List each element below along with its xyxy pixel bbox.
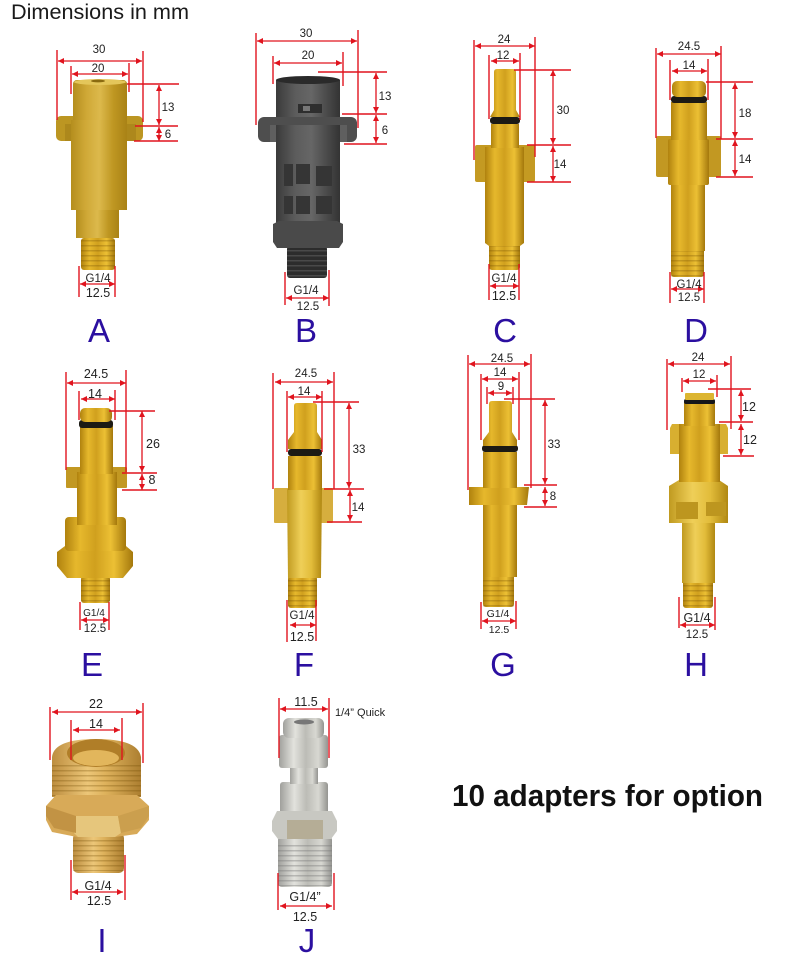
icon: brass adapter F — [274, 403, 333, 608]
dimension labels B: 30 — [300, 28, 312, 40]
adapter J — [272, 695, 386, 959]
dimension labels H: 12.5 — [686, 629, 708, 641]
dimension labels G: 33 — [548, 439, 560, 451]
dimension lines G — [468, 354, 557, 629]
dimension lines E — [66, 370, 157, 630]
dimension labels G: G1/4 — [487, 608, 510, 620]
icon: brass adapter C — [475, 69, 535, 270]
dimension labels J: 12.5 — [293, 910, 317, 924]
adapter I — [46, 697, 149, 959]
dimension labels A — [86, 44, 174, 300]
dimension labels H — [683, 352, 757, 641]
dimension labels B: 12.5 — [297, 301, 319, 313]
dimension labels C: G1/4 — [492, 273, 517, 285]
letter E: E — [81, 646, 103, 683]
dimension labels I: 14 — [89, 717, 103, 731]
dimension labels C: 24 — [498, 34, 511, 46]
adapter E — [57, 367, 160, 683]
dimension labels B — [294, 28, 391, 313]
letter F: F — [294, 646, 314, 683]
dimension labels F — [290, 368, 365, 644]
dimension labels C: 12.5 — [492, 289, 516, 303]
dimension labels D: G1/4 — [677, 279, 702, 291]
dimension labels I — [84, 697, 112, 908]
icon: stainless quick connect J — [272, 718, 337, 887]
dimension labels I: 22 — [89, 697, 103, 711]
dimension lines A — [57, 50, 179, 297]
dimension labels F: 24.5 — [295, 368, 317, 380]
dimension labels B: G1/4 — [294, 285, 319, 297]
letter H: H — [684, 646, 708, 683]
dimension labels B: 20 — [302, 50, 314, 62]
letter A: A — [88, 312, 110, 349]
dimension labels H: 12 — [693, 369, 705, 381]
dimension labels I: G1/4 — [84, 879, 112, 893]
dimension labels B: 6 — [382, 125, 388, 137]
dimension labels C — [492, 34, 569, 303]
dimension lines D — [656, 46, 753, 303]
icon: gold adapter H — [669, 393, 728, 608]
dimension labels A: 20 — [92, 63, 104, 75]
dimension labels D: 24.5 — [678, 41, 700, 53]
letter B: B — [295, 312, 317, 349]
dimension labels E: 8 — [149, 473, 156, 487]
dimension labels F: 33 — [353, 444, 365, 456]
dimension labels A: 12.5 — [86, 286, 110, 300]
dimension labels B: 13 — [379, 91, 391, 103]
dimension labels H: 12 — [743, 433, 757, 447]
callout: adapter count: 10 adapters for option — [452, 778, 763, 813]
dimension labels D — [677, 41, 752, 304]
icon: brass adapter E — [57, 408, 133, 603]
dimension labels F: 14 — [352, 502, 365, 514]
dimension labels C: 14 — [554, 159, 567, 171]
dimension labels H: G1/4 — [683, 611, 711, 625]
icon: brass adapter A — [56, 79, 143, 270]
adapter H — [667, 352, 757, 683]
dimension labels E: 26 — [146, 437, 160, 451]
dimension labels A: 13 — [162, 102, 174, 114]
dimension labels J: 1/4” Quick — [335, 707, 386, 719]
dimension labels G: 9 — [498, 381, 504, 393]
dimension labels E: 12.5 — [84, 623, 106, 635]
dimension labels A: G1/4 — [86, 273, 111, 285]
dimension lines C — [474, 37, 571, 300]
dimension labels J: 11.5 — [294, 695, 318, 709]
dimension labels G — [487, 353, 560, 636]
dimension labels C: 30 — [557, 105, 569, 117]
letter I: I — [97, 922, 107, 959]
dimension labels D: 14 — [739, 154, 752, 166]
letter J: J — [299, 922, 315, 959]
dimension labels A: 6 — [165, 129, 171, 141]
adapter D — [656, 41, 753, 349]
adapter C — [474, 34, 571, 349]
dimension labels D: 12.5 — [678, 292, 700, 304]
dimension labels G: 12.5 — [489, 624, 509, 636]
dimension labels E: 14 — [88, 387, 102, 401]
dimension labels C: 12 — [497, 50, 509, 62]
dimension labels D: 18 — [739, 108, 751, 120]
dimension labels E: 24.5 — [84, 367, 108, 381]
adapter B — [256, 28, 391, 349]
dimension labels J: G1/4” — [289, 890, 321, 904]
adapter A — [56, 44, 179, 349]
icon: brass adapter D — [656, 81, 721, 277]
dimension labels D: 14 — [683, 60, 696, 72]
icon: brass adapter G — [469, 401, 529, 607]
dimension lines F — [273, 372, 364, 642]
dimension labels H: 24 — [692, 352, 705, 364]
adapter G — [468, 353, 560, 683]
dimension labels G: 8 — [550, 491, 556, 503]
dimension labels F: 12.5 — [290, 630, 314, 644]
dimension labels J — [289, 695, 386, 924]
dimension lines J — [278, 698, 334, 910]
dimension labels G: 14 — [494, 367, 507, 379]
dimension lines I — [50, 703, 143, 900]
adapter F — [273, 368, 365, 683]
dimension labels F: G1/4 — [290, 610, 315, 622]
dimension labels E: G1/4 — [83, 608, 105, 619]
dimension labels F: 14 — [298, 386, 311, 398]
heading: dimensions note: Dimensions in mm — [11, 1, 189, 24]
dimension labels H: 12 — [742, 400, 756, 414]
dimension labels G: 24.5 — [491, 353, 513, 365]
letter D: D — [684, 312, 708, 349]
letter C: C — [493, 312, 517, 349]
icon: brass nipple adapter I — [46, 739, 149, 873]
dimension lines B — [256, 30, 387, 306]
letter G: G — [490, 646, 516, 683]
dimension labels A: 30 — [93, 44, 105, 56]
dimension labels E — [83, 367, 160, 635]
icon: black plastic adapter B — [258, 76, 357, 278]
dimension lines H — [667, 356, 754, 630]
dimension labels I: 12.5 — [87, 894, 111, 908]
